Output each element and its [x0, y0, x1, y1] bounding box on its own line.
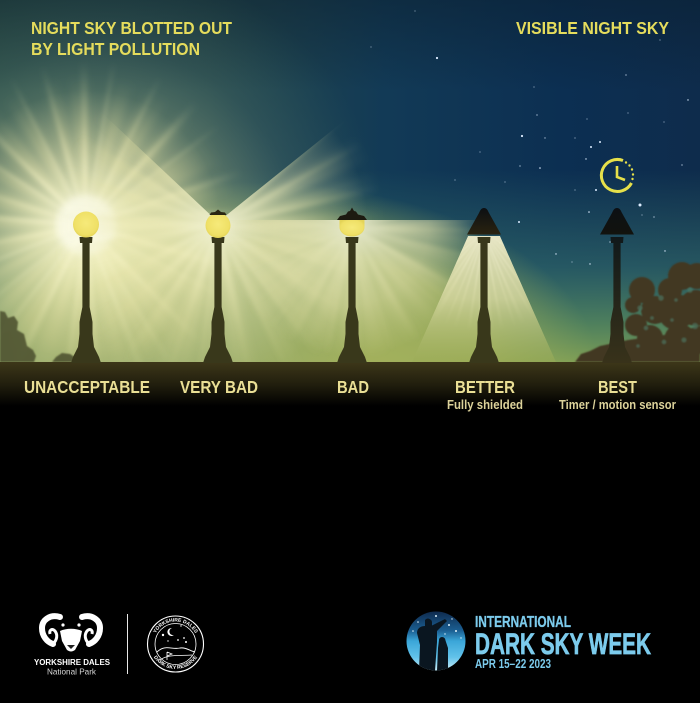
light spill: bad lamp: [256, 220, 477, 346]
light cone: better lamp: [421, 236, 556, 362]
lamp: unacceptable: [71, 212, 101, 363]
lamp labels: UNACCEPTABLE: [24, 377, 150, 397]
tree: left silhouette: [0, 311, 76, 362]
lamp labels: BEST: [598, 377, 637, 397]
lamp: very bad: [203, 210, 233, 363]
lamp: best: [600, 208, 634, 363]
icon: ram head: [42, 616, 100, 652]
trees: [0, 262, 700, 362]
tree: right silhouette: [575, 262, 700, 362]
logo: International Dark Sky Week: [406, 612, 651, 671]
lamp labels: Timer / motion sensor: [559, 398, 676, 412]
night sky background: [0, 0, 700, 362]
lamp labels: [24, 377, 676, 412]
logo: dark sky reserve badge: YORKSHIRE DALES: [152, 618, 198, 633]
lamp labels: BAD: [337, 377, 369, 397]
logo divider: [127, 614, 128, 674]
heading: visible night sky: VISIBLE NIGHT SKY: [516, 18, 669, 38]
logo: Yorkshire Dales National Park: [34, 616, 111, 676]
ground: [0, 362, 700, 406]
logo text: INTERNATIONAL: [475, 614, 571, 631]
light spill: very bad lamp: [72, 126, 370, 362]
logo: dark sky reserve badge: DARK SKY RESERVE: [154, 655, 198, 669]
heading: night sky blotted out: BY LIGHT POLLUTION: [31, 39, 200, 59]
logo: Yorkshire Dales National Park: National Park: [47, 666, 97, 676]
tree gaps: [636, 287, 698, 348]
lamp: bad: [337, 208, 367, 363]
logo text: YORKSHIRE DALES: [34, 658, 111, 667]
lamp labels: Fully shielded: [447, 398, 523, 412]
icon: clock timer: [601, 159, 634, 191]
heading: night sky blotted out: NIGHT SKY BLOTTED OUT: [31, 18, 232, 38]
heading: night sky blotted out: [31, 18, 232, 59]
icon: stargazers disc: [406, 612, 466, 671]
logo: dark sky reserve badge: [146, 616, 204, 672]
logo: International Dark Sky Week: APR 15–22 2023: [475, 657, 551, 671]
lamp labels: BETTER: [455, 377, 515, 397]
lamp labels: VERY BAD: [180, 377, 258, 397]
stars: [370, 10, 689, 265]
light spill: unacceptable lamp: [0, 90, 221, 360]
black lower area: [0, 406, 700, 703]
lamp: better: [467, 208, 501, 363]
